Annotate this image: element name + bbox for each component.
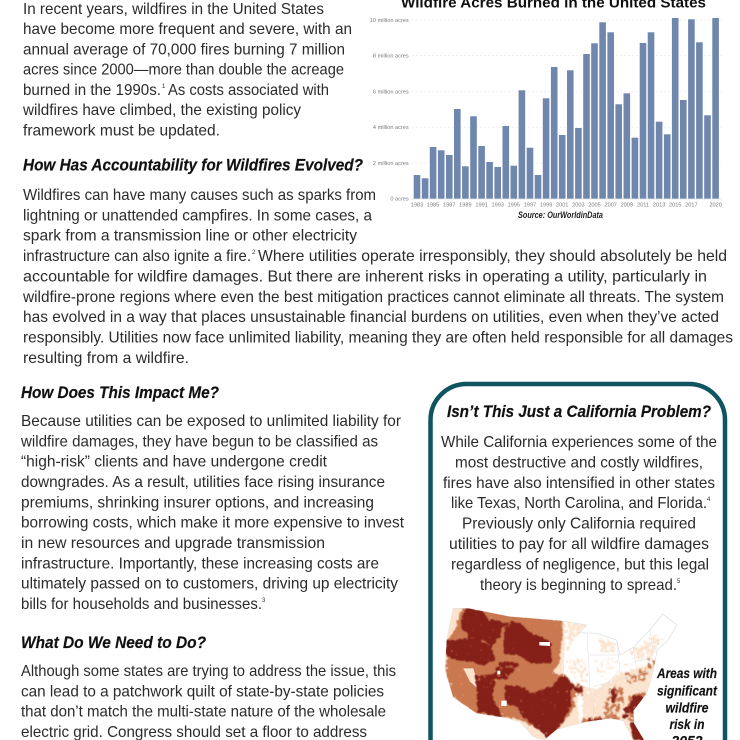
- x axis labels: 2017: [685, 202, 698, 208]
- text block: accountability: 2: [252, 250, 256, 256]
- map caption: wildfire: [666, 700, 709, 716]
- text block: introduction: In recent years, wildfires in the United States: [23, 1, 324, 18]
- text block: introduction: As costs associated with: [168, 82, 329, 99]
- chart: wildfire acres burned: [370, 0, 722, 220]
- text block: introduction: acres since 2000—more than double the acreage: [23, 62, 344, 78]
- text block: accountability: responsibly. Utilities now face unlimited liability, meaning they are often held responsible for all damages: [23, 330, 733, 346]
- panel border: [430, 384, 725, 740]
- text block: introduction: 1: [162, 84, 166, 90]
- y axis labels: 10 million acres: [370, 18, 409, 24]
- x axis labels: 2015: [669, 202, 681, 208]
- panel text: 4: [707, 497, 711, 503]
- x axis labels: 2020: [709, 202, 722, 208]
- y axis labels: 0 acres: [390, 197, 409, 203]
- text block: impact: 3: [262, 598, 266, 604]
- heading: impact: How Does This Impact Me?: [21, 384, 219, 402]
- y axis labels: 4 million acres: [373, 125, 409, 131]
- text block: accountability: lightning or unattended campfires. In some cases, a: [23, 207, 372, 224]
- text block: what to do: that don’t match the multi-state nature of the wholesale: [21, 704, 386, 721]
- map caption: significant: [657, 682, 718, 698]
- text block: impact: premiums, shrinking insurer options, and increasing: [21, 494, 374, 511]
- text block: accountability: wildfire-prone regions where even the best mitigation practices cannot eliminate all threats. The system: [22, 289, 724, 306]
- x axis labels: 1993: [491, 202, 504, 208]
- heading: accountability: How Has Accountability for Wildfires Evolved?: [23, 157, 363, 175]
- text block: introduction: annual average of 70,000 fires burning 7 million: [23, 41, 345, 58]
- x axis labels: [411, 202, 722, 208]
- text block: accountability: Wildfires can have many causes such as sparks from: [23, 187, 376, 204]
- text block: introduction: framework must be updated.: [23, 122, 220, 139]
- panel text: most destructive and costly wildfires,: [455, 454, 703, 472]
- x axis labels: 1997: [524, 202, 536, 208]
- text block: accountability: resulting from a wildfire.: [23, 350, 189, 367]
- panel text: Previously only California required: [462, 516, 696, 532]
- text block: impact: wildfire damages, they have begun to be classified as: [20, 433, 378, 450]
- panel: California callout: [430, 384, 725, 740]
- text block: impact: in new resources and upgrade transmission: [21, 535, 325, 552]
- x axis labels: 2005: [588, 202, 601, 208]
- y axis labels: [370, 18, 409, 203]
- panel text: utilities to pay for all wildfire damages: [449, 536, 709, 553]
- text block: introduction: burned in the 1990s.: [23, 82, 161, 99]
- y axis labels: 8 million acres: [373, 54, 409, 60]
- chart source: Source: OurWorldinData: [518, 210, 603, 220]
- x axis labels: 1995: [508, 202, 520, 208]
- y axis labels: 6 million acres: [373, 90, 409, 96]
- text block: impact: infrastructure. Importantly, these increasing costs are: [21, 555, 379, 572]
- x axis labels: 1985: [427, 202, 439, 208]
- text block: impact: “high-risk” clients and have undergone credit: [21, 454, 328, 471]
- panel text: regardless of negligence, but this legal: [451, 556, 709, 574]
- text block: impact: ultimately passed on to customers, driving up electricity: [21, 576, 398, 593]
- map caption: [656, 665, 718, 740]
- panel text: While California experiences some of the: [441, 434, 717, 451]
- heading: what to do: What Do We Need to Do?: [21, 634, 206, 652]
- text block: accountability: accountable for wildfire damages. But there are inherent risks in operating a utility, particularly in: [23, 268, 707, 286]
- text block: accountability: infrastructure can also ignite a fire.: [23, 248, 251, 265]
- text block: accountability: Where utilities operate irresponsibly, they should absolutely be held: [258, 248, 727, 265]
- y axis labels: 2 million acres: [373, 161, 409, 167]
- text block: impact: [20, 413, 405, 613]
- panel text: [441, 434, 717, 594]
- panel text: theory is beginning to spread.: [480, 577, 677, 594]
- panel text: fires have also intensified in other states: [443, 475, 715, 492]
- text block: what to do: [21, 663, 396, 740]
- x axis labels: 2003: [572, 202, 585, 208]
- text block: accountability: spark from a transmission line or other electricity: [23, 228, 357, 245]
- panel text: like Texas, North Carolina, and Florida.: [451, 495, 707, 512]
- text block: introduction: wildfires have climbed, the existing policy: [22, 102, 301, 119]
- text block: impact: borrowing costs, which make it more expensive to invest: [21, 515, 405, 532]
- text block: what to do: can lead to a patchwork quilt of state-by-state policies: [21, 683, 384, 700]
- x axis labels: 1983: [411, 202, 423, 208]
- x axis labels: 2013: [653, 202, 665, 208]
- map caption: risk in: [670, 716, 704, 732]
- text block: introduction: have become more frequent and severe, with an: [23, 21, 352, 38]
- bars: [414, 18, 719, 199]
- panel heading: Isn’t This Just a California Problem?: [447, 403, 711, 421]
- x axis labels: 2001: [556, 202, 568, 208]
- text block: introduction: [22, 1, 352, 139]
- x axis labels: 1999: [540, 202, 552, 208]
- map: wildfire risk: [437, 603, 677, 740]
- text block: impact: bills for households and businesses.: [21, 596, 262, 613]
- text block: what to do: Although some states are trying to address the issue, this: [21, 663, 396, 680]
- text block: accountability: has evolved in a way that places unsustainable financial burdens on utilities, even when they’ve acted: [23, 309, 719, 326]
- text block: impact: downgrades. As a result, utilities face rising insurance: [21, 474, 385, 491]
- x axis labels: 2009: [621, 202, 633, 208]
- map caption: Areas with: [656, 665, 717, 681]
- x axis labels: 1989: [459, 202, 472, 208]
- x axis labels: 1987: [443, 202, 456, 208]
- x axis labels: 1991: [475, 202, 488, 208]
- x axis labels: 2007: [604, 202, 617, 208]
- panel text: 5: [677, 579, 681, 585]
- x axis labels: 2011: [637, 202, 649, 208]
- text block: impact: Because utilities can be exposed to unlimited liability for: [21, 413, 402, 430]
- text block: accountability: [22, 187, 733, 367]
